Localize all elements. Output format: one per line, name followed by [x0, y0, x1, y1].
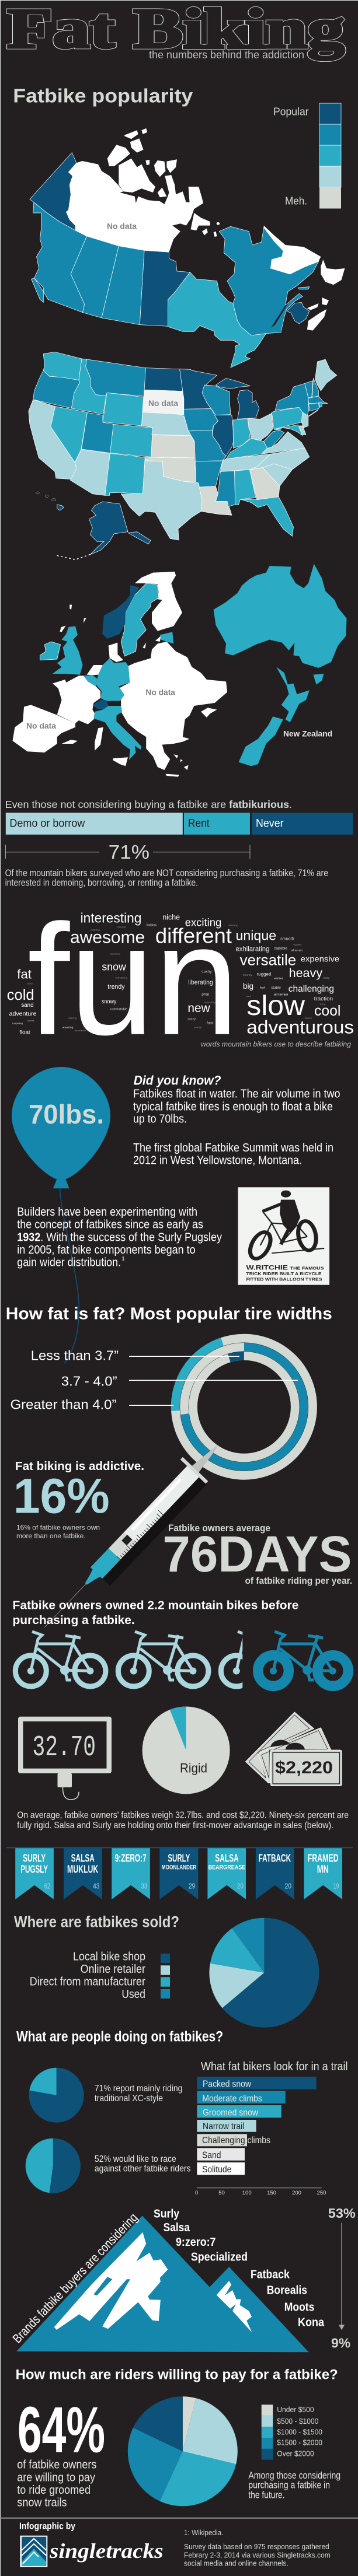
mountain: brands considered	[16, 2216, 309, 2352]
radial chart: tire widths	[175, 1338, 312, 1475]
ribbon: Framed MN: 19	[333, 1882, 339, 1890]
bar chart: what fat bikers look for in a trail: Packed snow	[203, 2079, 251, 2089]
icon: hanging scale 32.70: 32.70	[33, 1731, 96, 1765]
legend: where sold	[30, 1951, 170, 2001]
word cloud: exciting	[185, 916, 221, 928]
bracket: 71 percent	[5, 841, 250, 863]
text: did you know: 2012 in West Yellowstone, Montana.	[133, 1154, 302, 1167]
photo: W. Ritchie balloon tyre bicycle: FITTED WITH BALLOON TYRES	[246, 1278, 322, 1282]
bracket: 71 percent: 71%	[109, 841, 150, 863]
legend: where sold: Direct from manufacturer	[30, 1975, 145, 1988]
stat: 64 percent: 64%	[18, 2393, 105, 2466]
ribbon: Fatback: 20	[285, 1882, 291, 1890]
map: Canada	[30, 128, 345, 368]
word cloud: novelty	[194, 1027, 201, 1029]
stat: 64 percent: snow trails	[17, 2497, 67, 2510]
word cloud: hard	[27, 982, 33, 985]
word cloud: freedom	[117, 926, 127, 929]
Ontario	[168, 272, 266, 368]
stat: 16 percent addictive: Fat biking is addictive.	[15, 1460, 144, 1473]
text: XC riding	[95, 2084, 182, 2104]
heading: mountain bikes before	[13, 1599, 298, 1627]
legend: where sold: Local bike shop	[73, 1951, 145, 1964]
bar chart: what fat bikers look for in a trail: Sand	[202, 2150, 221, 2160]
ribbon: Surly Pugsly: SURLY	[23, 1852, 46, 1864]
label: no data Spain and France: No data	[26, 721, 56, 730]
stacked bar: demo, rent, never: Demo or borrow	[9, 818, 85, 830]
photo: W. Ritchie balloon tyre bicycle	[238, 1187, 329, 1285]
heading: fatbike popularity: Fatbike popularity	[13, 85, 193, 107]
Switzerland	[92, 700, 109, 710]
Labrador	[264, 226, 321, 274]
Alaska	[89, 502, 128, 555]
Britain	[53, 626, 83, 675]
stat: 64 percent: of fatbike owners	[17, 2459, 96, 2472]
word cloud: cool	[314, 1003, 340, 1019]
scale: 53 to 9 percent: 9%	[331, 2335, 350, 2350]
bar chart: what fat bikers look for in a trail: 250	[317, 2190, 326, 2196]
word cloud: snow	[102, 961, 127, 972]
Northwest Territories and Nunavut	[66, 128, 220, 252]
stat: 16 percent addictive: 16%	[13, 1468, 110, 1523]
text: did you know: typical fatbike tires is enough to float a bike	[133, 1100, 333, 1113]
text: fatbike history: Builders have been experimenting with	[17, 1206, 197, 1219]
ribbon: Salsa Beargrease: BEARGREASE	[208, 1864, 245, 1871]
stat: 64 percent: are willing to pay	[17, 2471, 95, 2484]
word cloud: fat	[17, 967, 32, 981]
bar chart: what fat bikers look for in a trail: 50	[218, 2190, 225, 2196]
caption: word cloud: words mountain bikers use to describe fatbiking	[201, 1040, 351, 1048]
text: sources: 1: Wikipedia.	[184, 2528, 223, 2537]
Gulf of St Lawrence	[271, 303, 288, 328]
stacked bar: demo, rent, never: Rent	[188, 818, 210, 830]
Germany	[96, 658, 130, 701]
legend: price ranges: Over $2000	[277, 2449, 314, 2458]
ribbon: Fatback	[256, 1848, 294, 1899]
text: fatbike history: 1932. With the success of the Surly Pugsley	[17, 1231, 222, 1244]
text: racing: against other fatbike riders	[95, 2164, 190, 2174]
bar chart: what fat bikers look for in a trail: Narrow trail	[203, 2122, 244, 2132]
word cloud: adventure	[9, 1010, 37, 1017]
logo: singletracks: singletracks	[49, 2539, 164, 2563]
ribbon: Surly Pugsly: PUGSLY	[20, 1863, 48, 1875]
pie: willingness to pay	[128, 2396, 238, 2506]
word cloud	[7, 892, 354, 1068]
ribbon: Fatback: FATBACK	[259, 1852, 291, 1864]
word cloud: anywhere	[110, 953, 121, 956]
text: weight and cost	[17, 1811, 349, 1831]
text: among those considering	[248, 2470, 340, 2500]
text: sources	[184, 2528, 331, 2567]
Hawaii	[36, 492, 64, 510]
bar chart: what fat bikers look for in a trail: Groomed snow	[203, 2108, 258, 2118]
stat: 64 percent: to ride groomed	[17, 2484, 91, 2497]
word cloud: fast	[207, 1021, 214, 1025]
Alberta	[71, 236, 119, 318]
bar chart: what fat bikers look for in a trail: Solitude	[202, 2165, 231, 2175]
map: Europe	[13, 572, 227, 777]
ribbon: Framed MN: MN	[317, 1863, 329, 1875]
Estonia	[160, 632, 173, 643]
word cloud: smooth	[280, 936, 294, 942]
heading: what people do: What are people doing on fatbikes?	[16, 2028, 223, 2045]
stat: 64 percent	[17, 2393, 105, 2510]
ribbon: Salsa Mukluk: 43	[93, 1882, 99, 1890]
list: brand names: 9:zero:7	[176, 2236, 216, 2249]
legend: price ranges: Under $500	[277, 2405, 314, 2414]
text: fatbike history: gain wider distribution.	[17, 1256, 121, 1269]
Sweden	[121, 583, 159, 656]
list: brand names: Fatback	[251, 2269, 290, 2281]
word cloud: unique	[236, 928, 276, 943]
legend: popularity scale	[273, 103, 341, 209]
word cloud: heavy	[289, 966, 322, 980]
word cloud: sand	[21, 1002, 34, 1009]
ribbon: Salsa Mukluk: SALSA	[71, 1852, 95, 1864]
scale: 53 to 9 percent	[328, 2206, 356, 2350]
word cloud: rugged	[257, 972, 271, 977]
word cloud: interesting	[81, 911, 141, 926]
Manitoba	[140, 250, 190, 326]
word cloud: float	[19, 1030, 30, 1035]
list: brand names: Borealis	[267, 2284, 307, 2297]
ribbon: 9:zero:7	[112, 1848, 150, 1899]
ribbon: 9:zero:7: 9:ZERO:7	[115, 1852, 147, 1864]
text: fatbike history: 1	[121, 1256, 125, 1262]
word cloud: bury	[320, 1003, 325, 1006]
text: racing: 52% would like to race	[95, 2154, 176, 2164]
text: 71 percent explanation	[5, 868, 328, 888]
list: brand names: Kona	[298, 2316, 325, 2329]
word cloud: cushy	[201, 970, 212, 974]
list: brand names: Surly	[154, 2208, 180, 2221]
photo: W. Ritchie balloon tyre bicycle: TRICK RIDER BUILT A BICYCLE	[246, 1272, 322, 1276]
word cloud: new	[187, 1002, 211, 1015]
icon: money $2,220: $2,220	[275, 1758, 333, 1777]
Saskatchewan	[102, 246, 144, 325]
label: brands along slope: Brands fatbike buyers are considering	[10, 2210, 140, 2346]
word cloud: addictive	[91, 928, 101, 931]
stacked bar: demo, rent, never	[6, 813, 353, 835]
Finland and northern Scandinavia	[135, 572, 182, 631]
word cloud: exhilarating	[236, 945, 269, 953]
Ireland	[40, 642, 61, 660]
bar chart: what fat bikers look for in a trail: Challenging climbs	[202, 2136, 270, 2146]
word cloud: snowy	[102, 999, 116, 1005]
ribbon: Salsa Mukluk	[64, 1848, 102, 1899]
Maritimes	[307, 298, 329, 331]
word cloud: capable	[274, 947, 287, 951]
text: did you know: up to 70lbs.	[133, 1113, 187, 1126]
stat: 76 days: 76DAYS	[162, 1526, 352, 1583]
ribbon: Framed MN	[304, 1848, 342, 1899]
ribbon: 9:zero:7: 33	[141, 1882, 148, 1890]
map: Australia and New Zealand	[214, 564, 347, 766]
map: United States	[29, 352, 337, 559]
bar chart: what fat bikers look for in a trail: 150	[267, 2190, 276, 2196]
text: 71 percent explanation: interested in demoing, borrowing, or renting a fatbike.	[5, 877, 198, 888]
word cloud: relaxed	[304, 1017, 312, 1020]
balloon: 70lbs: 70lbs.	[29, 1099, 104, 1129]
word cloud: all terrain	[291, 949, 303, 952]
word cloud: refreshing	[116, 977, 127, 979]
pie: rigid	[142, 1707, 230, 1794]
text: fatbike history: in 2005, fat bike components began to	[17, 1244, 196, 1256]
list: brand names	[154, 2208, 325, 2329]
heading: tire widths: How fat is fat? Most popular tire widths	[6, 1305, 332, 1324]
word cloud: traction	[314, 996, 333, 1002]
legend: where sold: Online retailer	[81, 1963, 145, 1976]
Yukon	[30, 153, 77, 230]
word cloud: refreshing	[204, 1001, 216, 1003]
label: New Zealand: New Zealand	[283, 729, 332, 738]
word cloud: phat	[201, 993, 210, 997]
heading: mountain bikes before: Fatbike owners owned 2.2 mountain bikes before	[13, 1599, 298, 1612]
word cloud: versatile	[240, 951, 296, 968]
stat: 16 percent addictive	[13, 1460, 144, 1540]
word cloud: niche	[162, 913, 180, 922]
legend: price ranges	[262, 2404, 322, 2460]
legend: price ranges: $1000 - $1500	[277, 2427, 322, 2436]
stat: 16 percent addictive: more than one fatbike.	[16, 1532, 86, 1540]
icon: money $2,220	[245, 1712, 342, 1786]
pie: XC riding	[29, 2068, 84, 2123]
word cloud: fun	[27, 892, 239, 1068]
word cloud: stable	[271, 986, 281, 990]
ribbon: Salsa Beargrease: SALSA	[215, 1852, 239, 1864]
ribbon: Surly Moonlander: SURLY	[168, 1852, 190, 1864]
word cloud: easy	[324, 976, 329, 979]
Anticosti Island	[298, 287, 310, 289]
icon: partial bike	[218, 1630, 243, 1689]
ribbon: Surly Pugsly	[15, 1848, 54, 1899]
scale: 53 to 9 percent: 53%	[328, 2206, 356, 2221]
small white territories	[13, 605, 227, 777]
label: 3.7 to 4.0: 3.7 - 4.0”	[61, 1373, 117, 1388]
text: did you know: The first global Fatbike Summit was held in	[133, 1142, 333, 1154]
pie: racing	[26, 2138, 81, 2193]
Italy	[93, 706, 141, 760]
ribbon: Surly Moonlander	[159, 1848, 198, 1899]
label: no data Canada: No data	[107, 221, 137, 230]
ribbon: Surly Pugsly: 62	[44, 1882, 50, 1890]
text: fatbike history: the concept of fatbikes since as early as	[17, 1219, 203, 1231]
legend: price ranges: $1500 - $2000	[277, 2438, 322, 2447]
word cloud: adventurous	[246, 1017, 354, 1038]
stat: 76 days: Fatbike owners average	[168, 1523, 270, 1534]
label: less than 3.7: Less than 3.7”	[31, 1348, 119, 1363]
ribbon: Framed MN: FRAMED	[308, 1852, 339, 1864]
icon: fat bike	[258, 1632, 348, 1686]
word cloud: awesome	[70, 928, 145, 947]
text: fatbike history	[17, 1206, 222, 1269]
word cloud: trendy	[107, 984, 125, 991]
list: brand names: Specialized	[191, 2251, 248, 2264]
heading: fatbikurious: Even those not considering buying a fatbike are fatbikurious.	[5, 799, 292, 810]
bar chart: what fat bikers look for in a trail: 100	[242, 2190, 252, 2196]
bar chart: what fat bikers look for in a trail: Moderate climbs	[202, 2094, 262, 2104]
word cloud: comfortable	[110, 1008, 127, 1012]
stat: 76 days: of fatbike riding per year.	[245, 1576, 352, 1586]
bar chart: what fat bikers look for in a trail: 0	[195, 2190, 198, 2196]
icon: hanging scale 32.70	[18, 1717, 112, 1800]
ribbons: fatbike sales by model	[6, 1847, 353, 1899]
stat: 16 percent addictive: 16% of fatbike owners own	[16, 1524, 100, 1532]
word cloud: amazing	[62, 1026, 74, 1029]
word cloud: big	[243, 982, 253, 991]
ribbon: Surly Moonlander: MOONLANDER	[162, 1864, 196, 1871]
text: among those considering: the future.	[248, 2490, 285, 2500]
Norway	[102, 585, 140, 639]
ribbon: Salsa Beargrease	[207, 1848, 246, 1899]
word cloud: all terrain	[274, 993, 288, 997]
word cloud: different	[155, 924, 232, 948]
Newfoundland	[321, 260, 345, 285]
subtitle: the numbers behind the addiction	[149, 49, 304, 61]
bar chart: what fat bikers look for in a trail	[195, 2060, 348, 2196]
icon: mountain bike 1	[15, 1632, 106, 1686]
balloon: 70lbs	[12, 1067, 110, 1188]
British Columbia	[33, 202, 87, 313]
text: XC riding: 71% report mainly riding	[95, 2084, 182, 2094]
bar chart: what fat bikers look for in a trail: 200	[292, 2190, 301, 2196]
Quebec	[219, 226, 318, 335]
text: did you know	[133, 1073, 340, 1167]
legend: popularity scale: Popular	[273, 105, 309, 118]
word cloud: slow	[246, 991, 305, 1021]
text: racing	[95, 2154, 190, 2174]
word cloud: bouncy	[243, 974, 252, 977]
New Brunswick	[287, 302, 310, 324]
text: sources: Survey data based on 975 responses gathered	[184, 2542, 329, 2551]
stacked bar: demo, rent, never: Never	[256, 818, 284, 830]
heading: how much: How much are riders willing to pay for a fatbike?	[16, 2367, 338, 2382]
word cloud: hard	[246, 995, 251, 998]
icon: syringe	[32, 1434, 230, 1640]
text: XC riding: traditional XC-style	[95, 2094, 163, 2104]
text: sources: social media and online channels.	[184, 2558, 289, 2567]
credit: infographic by: Infographic by	[19, 2522, 75, 2532]
text: sources: Febrary 2-3, 2014 via various Singletracks.com	[184, 2550, 331, 2559]
pie: rigid: Rigid	[180, 1760, 207, 1775]
photo: W. Ritchie balloon tyre bicycle: W.RITCHIE THE FAMOUS	[246, 1265, 324, 1272]
legend: where sold: Used	[121, 1988, 145, 2001]
word cloud: refreshing	[228, 923, 238, 926]
word cloud: expensive	[301, 954, 339, 963]
word cloud: liberating	[188, 979, 213, 986]
text: among those considering: Among those considering	[248, 2470, 340, 2481]
label: no data South Dakota: No data	[148, 398, 178, 408]
word cloud: relaxing	[68, 1017, 77, 1020]
ribbon: Salsa Mukluk: MUKLUK	[67, 1863, 99, 1875]
text: among those considering: purchasing a fatbike in	[248, 2480, 330, 2491]
label: no data eastern Europe: No data	[145, 688, 175, 697]
pie: where sold	[209, 1918, 319, 2028]
Belgium	[84, 675, 97, 687]
word cloud: limitless	[147, 923, 157, 927]
heading: where sold: Where are fatbikes sold?	[14, 1913, 179, 1930]
ribbon: Surly Moonlander: 29	[189, 1882, 195, 1890]
label: greater than 4.0: Greater than 4.0”	[11, 1396, 116, 1412]
text: did you know: Did you know?	[134, 1073, 221, 1087]
word cloud: inspiring	[12, 1021, 23, 1024]
text: did you know: Fatbikes float in water. The air volume in two	[133, 1088, 340, 1101]
list: brand names: Salsa	[164, 2221, 190, 2234]
ribbon: Salsa Beargrease: 20	[237, 1882, 244, 1890]
word cloud: winter	[273, 977, 283, 980]
word cloud: fad	[260, 986, 265, 989]
logo: singletracks	[20, 2536, 164, 2567]
icon: mountain bike 2	[118, 1632, 208, 1686]
word cloud: challenging	[289, 984, 334, 994]
legend: price ranges: $500 - $1000	[277, 2417, 318, 2426]
legend: popularity scale: Meh.	[285, 195, 307, 207]
Vancouver Island	[32, 278, 43, 302]
word cloud: innovative	[75, 1030, 86, 1032]
heading: mountain bikes before: purchasing a fatbike.	[13, 1614, 135, 1627]
list: brand names: Moots	[284, 2301, 314, 2314]
word cloud: shoots	[27, 1020, 34, 1022]
balloon string	[60, 1188, 79, 1363]
word cloud: equality	[293, 944, 301, 946]
word cloud: cold	[7, 987, 34, 1003]
word cloud: crazy	[187, 1017, 196, 1021]
